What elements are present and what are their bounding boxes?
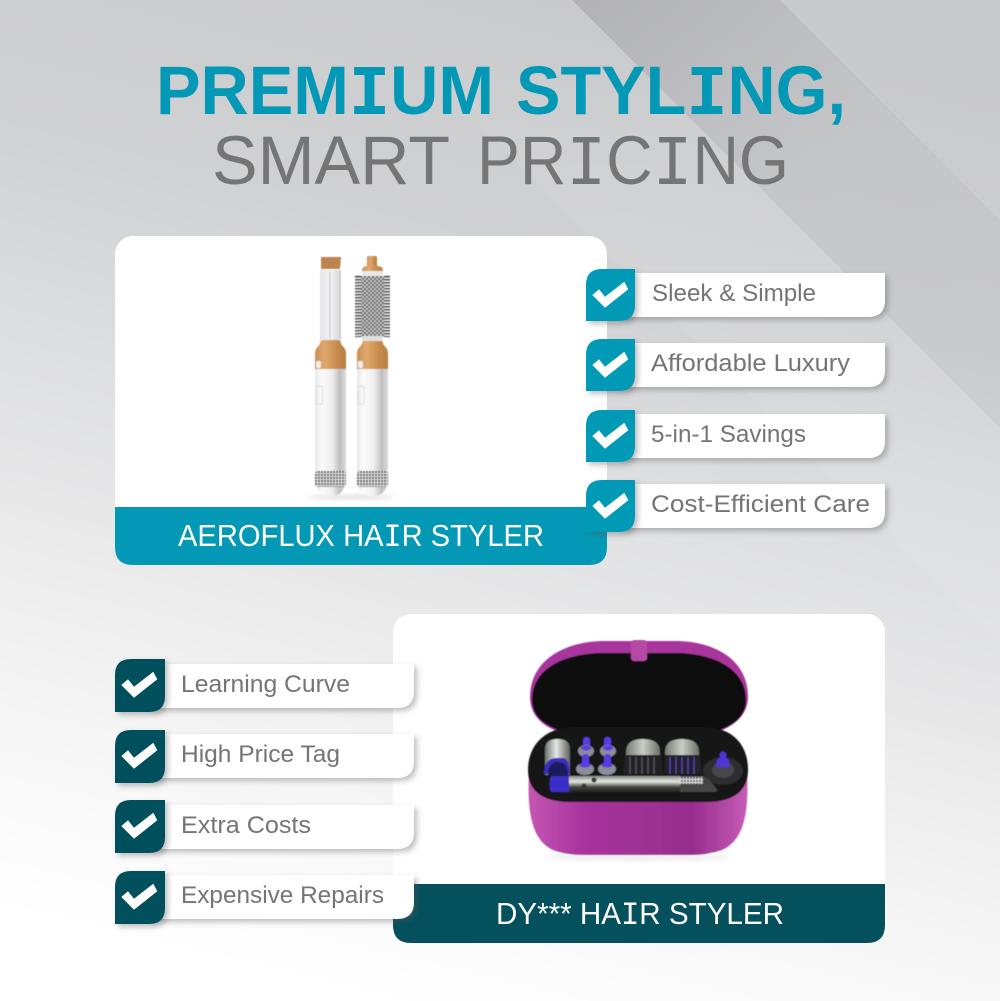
panel: DY*** product card [393, 614, 885, 943]
item: Cost-Efficient Care: Cost-Efficient Care [651, 491, 870, 518]
item: Cost-Efficient Care [586, 480, 885, 532]
feature list: Aeroflux [586, 269, 885, 532]
wand [550, 776, 718, 792]
title: PREMIUM [156, 52, 494, 136]
item: Expensive Repairs: Expensive Repairs [181, 882, 384, 909]
item: Affordable Luxury [586, 339, 885, 391]
item: Expensive Repairs [115, 871, 414, 924]
item: Learning Curve: Learning Curve [181, 671, 350, 698]
item: Sleek & Simple [586, 269, 885, 321]
item: 5-in-1 Savings [586, 410, 885, 462]
title: PRICING [477, 122, 789, 206]
accessories [544, 737, 743, 785]
item: 5-in-1 Savings: 5-in-1 Savings [651, 421, 806, 448]
icon: purple styler case [528, 640, 748, 861]
item: Sleek & Simple: Sleek & Simple [652, 280, 816, 307]
title: SMART [212, 122, 450, 199]
name band: Aeroflux [115, 507, 607, 565]
name band: DY***: DY*** HAIR STYLER [496, 896, 784, 934]
lid [530, 640, 748, 734]
panel: Aeroflux product card [115, 236, 607, 565]
item: Affordable Luxury: Affordable Luxury [651, 350, 850, 377]
name band: Aeroflux: AEROFLUX HAIR STYLER [178, 518, 544, 556]
item: Extra Costs [115, 800, 414, 853]
item: High Price Tag [115, 730, 414, 783]
title [156, 52, 846, 206]
name band: DY*** [393, 884, 885, 943]
feature list: DY*** [115, 659, 414, 924]
item: Learning Curve [115, 659, 414, 712]
item: High Price Tag: High Price Tag [181, 741, 340, 768]
title: STYLING, [516, 52, 846, 136]
icon: Aeroflux hair stylers [307, 256, 395, 499]
item: Extra Costs: Extra Costs [181, 812, 311, 839]
case base [528, 727, 748, 855]
